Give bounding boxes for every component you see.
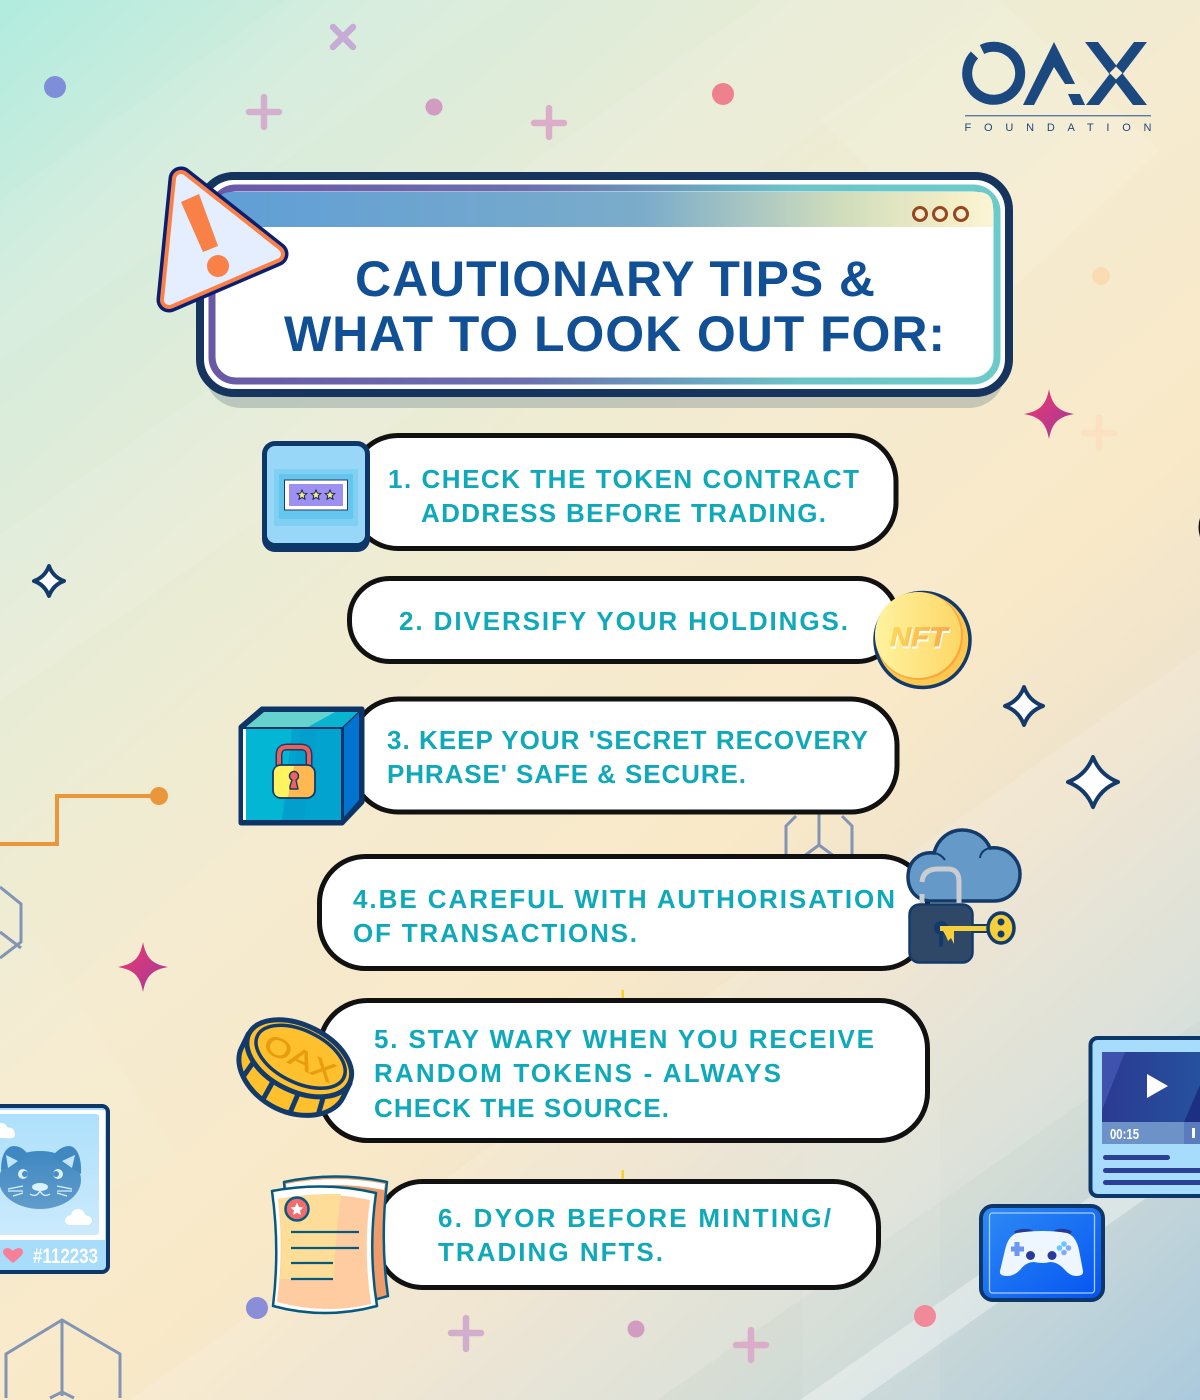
panel: tip 5 xyxy=(320,1000,928,1140)
panel: tip 4: OF TRANSACTIONS. xyxy=(353,918,637,948)
icon: OAX coin xyxy=(224,1004,365,1133)
panel: tip 6 xyxy=(378,1182,878,1288)
heading xyxy=(284,251,945,362)
card: cat NFT: #112233 xyxy=(33,1245,98,1268)
icon: document xyxy=(272,1176,388,1313)
logo wordmark: FOUNDATION xyxy=(964,122,1152,134)
panel: title window xyxy=(200,176,1009,408)
cat face xyxy=(0,1146,81,1209)
orange circuit line xyxy=(0,787,168,844)
panel: tip 3: PHRASE' SAFE & SECURE. xyxy=(387,759,746,789)
panel: tip 6: 6. DYOR BEFORE MINTING/ xyxy=(438,1203,831,1233)
panel: tip 4 xyxy=(320,856,928,968)
panel: tip 4: 4.BE CAREFUL WITH AUTHORISATION xyxy=(353,884,895,914)
white star sparkles xyxy=(34,566,1118,807)
icon: locked cube xyxy=(241,709,362,823)
icon: OAX coin: OAX xyxy=(259,1028,340,1089)
panel: tip 1 xyxy=(352,436,896,548)
panel: tip 5: 5. STAY WARY WHEN YOU RECEIVE xyxy=(374,1024,874,1054)
icon: ticket box xyxy=(262,441,370,552)
panel: tip 3 xyxy=(352,699,897,812)
window control dots xyxy=(914,208,968,220)
heading: WHAT TO LOOK OUT FOR: xyxy=(284,306,945,362)
edge mark xyxy=(1198,518,1200,537)
icon: warning triangle xyxy=(169,179,276,300)
icon: game controller tile xyxy=(981,1206,1103,1300)
decorative plus and cross marks xyxy=(249,27,1114,1360)
hexagon outlines xyxy=(0,810,852,1398)
panel: tip 2: 2. DIVERSIFY YOUR HOLDINGS. xyxy=(399,606,848,636)
panel: tip 6: TRADING NFTS. xyxy=(438,1237,663,1267)
icon: NFT coin: NFT xyxy=(890,622,950,652)
pink sparkles xyxy=(118,389,1074,992)
card: video player: 00:15 xyxy=(1110,1127,1139,1143)
heading: CAUTIONARY TIPS & xyxy=(355,251,875,307)
panel: tip 3: 3. KEEP YOUR 'SECRET RECOVERY xyxy=(387,725,868,755)
panel: tip 2 xyxy=(350,578,898,662)
icon: NFT coin xyxy=(875,592,970,688)
panel: tip 1: ADDRESS BEFORE TRADING. xyxy=(421,498,826,528)
card: cat NFT xyxy=(0,1106,108,1272)
icon: cloud padlock and key xyxy=(908,830,1020,962)
card: video player xyxy=(1090,1038,1200,1196)
logo mark xyxy=(965,42,1151,116)
panel: tip 5: RANDOM TOKENS - ALWAYS xyxy=(374,1058,781,1088)
OAX Foundation logo xyxy=(964,42,1152,134)
panel: tip 5: CHECK THE SOURCE. xyxy=(374,1093,669,1123)
icon: NFT coin: NFT xyxy=(891,624,951,654)
panel: tip 1: 1. CHECK THE TOKEN CONTRACT xyxy=(388,464,859,494)
small yellow ticks xyxy=(622,990,624,1179)
